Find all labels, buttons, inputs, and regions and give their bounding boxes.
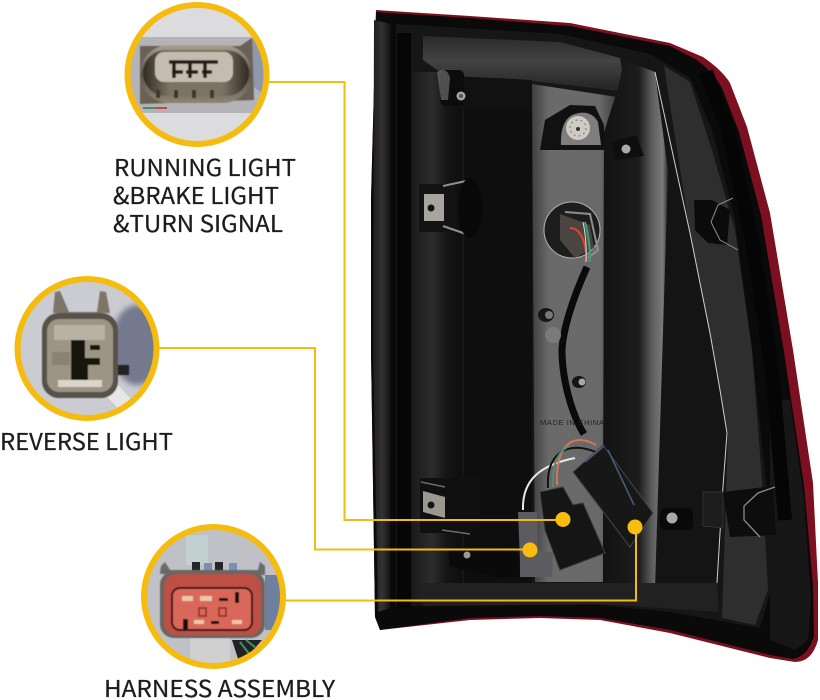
lower left clip [420,478,480,534]
upper left screw [437,70,466,106]
leader dots [522,512,642,558]
wiring loom [562,267,587,434]
label: running light: RUNNING LIGHT [114,149,296,183]
leader: harness [285,527,636,600]
callout: running light connector [125,2,269,147]
leader: running light [268,82,563,520]
black rear shell [371,12,814,659]
label: reverse light: REVERSE LIGHT [0,423,173,457]
left rib [412,72,462,602]
left upper clip [419,178,482,238]
label: running light [113,149,296,239]
icon: connector body [160,562,265,638]
right upper clip [694,198,738,250]
round boss with sensor [540,105,604,150]
right side panel [664,66,768,625]
lower screw [660,508,693,530]
leader: reverse light [158,348,530,550]
pegs [538,308,586,388]
right outer shell shading [770,400,811,650]
tail light housing [371,10,818,662]
central light panel [532,84,617,582]
left outer strip [373,20,391,612]
top band [423,36,626,92]
connector: grey reverse [518,512,553,577]
connector: black middle [540,487,605,570]
moulded text: MADE IN CHINA [540,418,604,427]
bottom left mount [448,550,520,578]
label: running light: &BRAKE LIGHT [113,177,279,211]
label: running light: &TURN SIGNAL [113,205,283,239]
leader lines [158,82,636,600]
red lens edge [371,10,818,662]
callout: reverse light connector [14,276,163,422]
right dark triangle panel [655,72,727,605]
inner rear panel [396,24,772,628]
inner dark channel [464,106,532,601]
black channel [706,72,785,520]
icon: connector body [140,38,254,104]
lower right clip [703,486,776,537]
bottom band [423,583,719,612]
connector: black right [573,445,653,547]
wire pigtail [523,440,596,510]
bright crease line [655,72,727,583]
callout: harness assembly connector [141,524,290,670]
upper right screw [612,135,644,160]
icon: connector body [42,291,129,398]
right raised rib [603,60,668,590]
bulb socket [544,202,600,262]
